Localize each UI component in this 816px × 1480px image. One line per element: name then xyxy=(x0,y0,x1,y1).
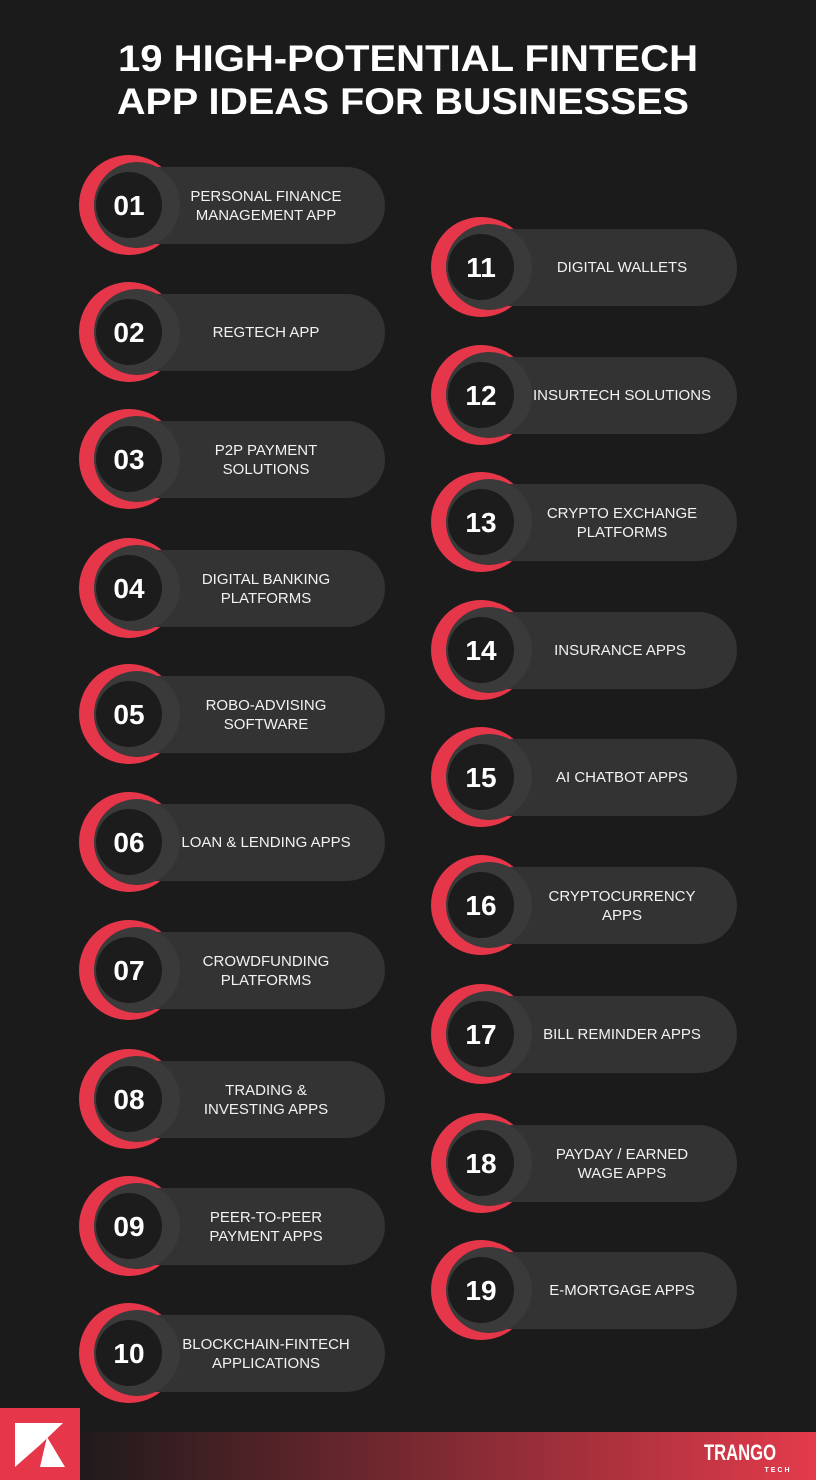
item 02: 02 xyxy=(113,317,145,348)
item 13: PLATFORMS xyxy=(577,524,667,541)
item 01 xyxy=(79,155,385,255)
item 05: 05 xyxy=(113,699,145,730)
item 04: 04 xyxy=(113,573,145,604)
item 10: BLOCKCHAIN-FINTECH xyxy=(182,1336,350,1353)
item 17 xyxy=(431,984,737,1084)
item 02: REGTECH APP xyxy=(213,324,319,341)
item 18 xyxy=(431,1113,737,1213)
item 05: SOFTWARE xyxy=(224,716,308,733)
item 02 xyxy=(79,282,385,382)
item 15 xyxy=(431,727,737,827)
item 16: CRYPTOCURRENCY xyxy=(549,888,695,905)
item 09: PEER-TO-PEER xyxy=(210,1209,322,1226)
item 11: 11 xyxy=(466,252,496,283)
item 03: P2P PAYMENT xyxy=(215,442,317,459)
item 12: INSURTECH SOLUTIONS xyxy=(533,387,711,404)
item 10: 10 xyxy=(113,1338,145,1369)
item 08: TRADING & xyxy=(225,1082,307,1099)
item 15: AI CHATBOT APPS xyxy=(556,769,688,786)
item 06: 06 xyxy=(113,827,145,858)
item 13: CRYPTO EXCHANGE xyxy=(547,505,697,522)
footer bar xyxy=(80,1432,816,1480)
item 12 xyxy=(431,345,737,445)
item 14: 14 xyxy=(465,635,497,666)
item 04: DIGITAL BANKING xyxy=(202,571,330,588)
brand logo xyxy=(704,1440,792,1474)
item 07 xyxy=(79,920,385,1020)
item 09 xyxy=(79,1176,385,1276)
item 16: APPS xyxy=(602,907,642,924)
title xyxy=(117,38,698,122)
title: APP IDEAS FOR BUSINESSES xyxy=(117,81,689,122)
footer logo square xyxy=(0,1408,80,1480)
item 07: 07 xyxy=(113,955,145,986)
item 14 xyxy=(431,600,737,700)
item 01: PERSONAL FINANCE xyxy=(190,188,342,205)
item 13: 13 xyxy=(465,507,497,538)
item 05 xyxy=(79,664,385,764)
item 16 xyxy=(431,855,737,955)
brand logo: TRANGO xyxy=(704,1440,776,1465)
item 19 xyxy=(431,1240,737,1340)
item 07: PLATFORMS xyxy=(221,972,311,989)
item 10: APPLICATIONS xyxy=(212,1355,320,1372)
item 14: INSURANCE APPS xyxy=(554,642,686,659)
title: 19 HIGH-POTENTIAL FINTECH xyxy=(118,38,698,79)
item 08 xyxy=(79,1049,385,1149)
item 09: PAYMENT APPS xyxy=(209,1228,323,1245)
item 12: 12 xyxy=(465,380,497,411)
item 18: WAGE APPS xyxy=(578,1165,666,1182)
item 19: 19 xyxy=(465,1275,497,1306)
item 06 xyxy=(79,792,385,892)
item 08: INVESTING APPS xyxy=(204,1101,328,1118)
item 04: PLATFORMS xyxy=(221,590,311,607)
item 09: 09 xyxy=(113,1211,145,1242)
item 08: 08 xyxy=(113,1084,145,1115)
item 11: DIGITAL WALLETS xyxy=(557,259,687,276)
item 03: 03 xyxy=(113,444,145,475)
item 07: CROWDFUNDING xyxy=(203,953,329,970)
item 18: 18 xyxy=(465,1148,497,1179)
item 13 xyxy=(431,472,737,572)
item 17: BILL REMINDER APPS xyxy=(543,1026,701,1043)
item 16: 16 xyxy=(465,890,497,921)
item 06: LOAN & LENDING APPS xyxy=(181,834,351,851)
item 04 xyxy=(79,538,385,638)
brand logo: TECH xyxy=(764,1467,792,1474)
item 18: PAYDAY / EARNED xyxy=(556,1146,688,1163)
item 03 xyxy=(79,409,385,509)
item 19: E-MORTGAGE APPS xyxy=(549,1282,695,1299)
item 15: 15 xyxy=(465,762,497,793)
item 11 xyxy=(431,217,737,317)
item 10 xyxy=(79,1303,385,1403)
item 05: ROBO-ADVISING xyxy=(206,697,326,714)
item 17: 17 xyxy=(465,1019,497,1050)
item 03: SOLUTIONS xyxy=(223,461,309,478)
item 01: MANAGEMENT APP xyxy=(196,207,336,224)
item 01: 01 xyxy=(113,190,145,221)
